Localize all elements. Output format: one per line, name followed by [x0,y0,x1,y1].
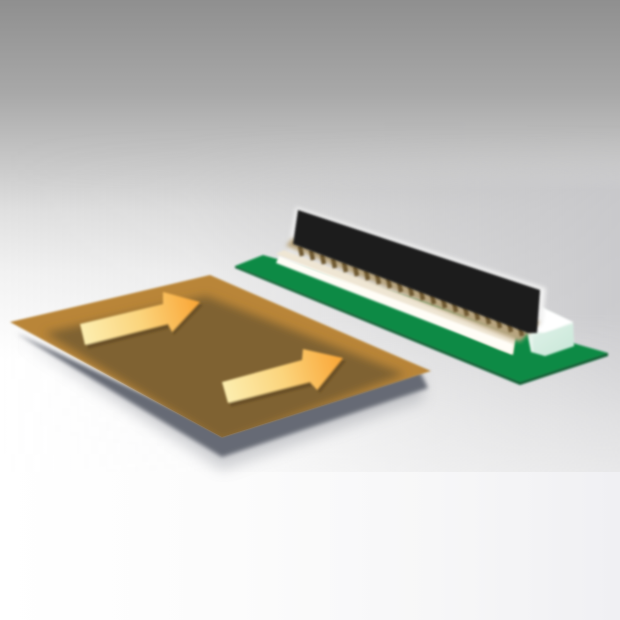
white outline behind latch [288,207,546,330]
flexible cable [10,275,431,442]
contact band [286,238,540,342]
black latch [293,210,540,333]
arrow 2 [222,349,346,407]
green PCB [235,255,608,385]
shadow under flexible cable [16,333,428,470]
contact teeth [300,246,522,336]
connector [276,207,574,356]
white strip at base [276,250,516,355]
cable dark inner area [45,296,405,442]
arrow 1 [80,292,203,349]
cable amber base [10,275,431,437]
right white housing block [527,305,574,356]
